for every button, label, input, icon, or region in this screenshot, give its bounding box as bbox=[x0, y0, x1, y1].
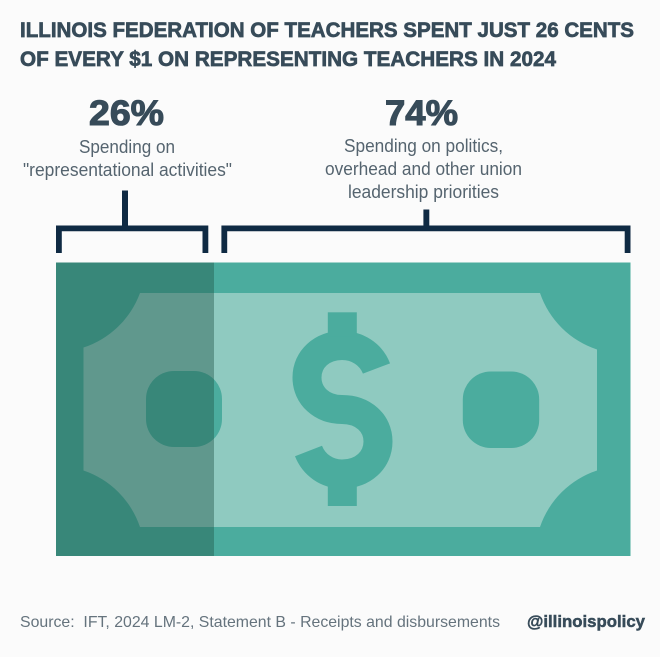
value: 26%: 26% bbox=[89, 94, 164, 133]
icon: right rounded square bbox=[463, 372, 539, 448]
callout: 74 percent bbox=[325, 94, 522, 202]
value: 74%: 74% bbox=[385, 94, 458, 133]
description: other spending: Spending on politics, bbox=[344, 136, 503, 156]
dollar bill bbox=[56, 262, 630, 556]
icon: left rounded square bbox=[146, 371, 222, 447]
bracket: 74 percent bbox=[221, 210, 630, 253]
icon: dollar sign bbox=[307, 312, 378, 506]
callout: 26 percent bbox=[23, 94, 232, 180]
bill inner panel bbox=[84, 293, 597, 527]
description: representational spending bbox=[23, 137, 232, 180]
description: representational spending: Spending on bbox=[79, 137, 175, 157]
handle: @illinoispolicy bbox=[527, 612, 646, 631]
overlay: 26 percent share bbox=[56, 262, 214, 556]
title bbox=[20, 18, 634, 71]
description: representational spending: "representational activities" bbox=[23, 160, 232, 180]
bill background bbox=[56, 262, 630, 556]
title: OF EVERY $1 ON REPRESENTING TEACHERS IN 2024 bbox=[20, 47, 556, 71]
description: other spending bbox=[325, 136, 522, 202]
bracket: 26 percent bbox=[56, 190, 208, 253]
description: other spending: overhead and other union bbox=[325, 159, 522, 179]
title: ILLINOIS FEDERATION OF TEACHERS SPENT JUST 26 CENTS bbox=[20, 18, 634, 42]
description: other spending: leadership priorities bbox=[348, 182, 499, 202]
source note: Source: IFT, 2024 LM-2, Statement B - Receipts and disbursements bbox=[20, 614, 500, 631]
